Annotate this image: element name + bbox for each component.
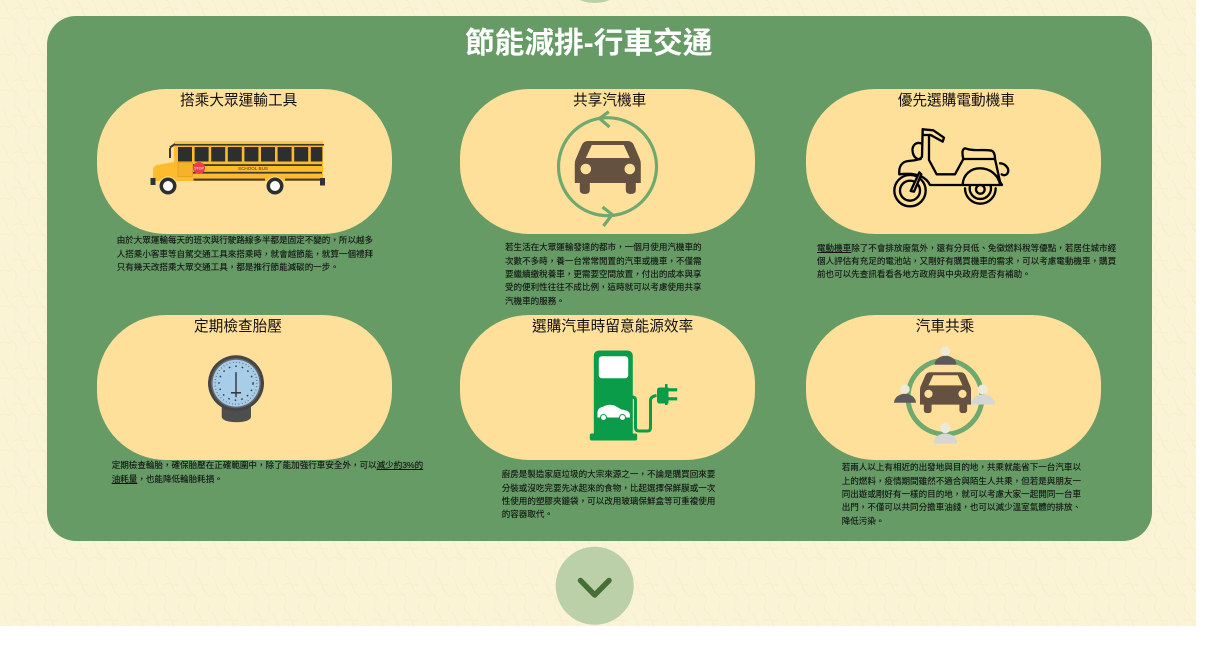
text: energy efficiency: 分裝或沒吃完要先冰起來的食物，比起選擇保鮮膜或一次 xyxy=(502,482,715,492)
heading: tire pressure: 定期檢查胎壓 xyxy=(194,319,282,335)
text: energy efficiency: 的容器取代。 xyxy=(502,509,553,519)
text: energy efficiency xyxy=(502,469,715,519)
text: public transport: 只有幾天改搭乘大眾交通工具，都是推行節能減碳的一步。 xyxy=(117,262,339,272)
title: 節能減排-行車交通 xyxy=(465,26,712,60)
panel: energy saving transport xyxy=(47,16,1152,541)
icon: school bus xyxy=(150,141,325,194)
text: public transport: 人搭乘小客車等自駕交通工具來搭乘時，就會越節能，就算一個禮拜 xyxy=(117,249,373,259)
icon: scooter xyxy=(893,128,1010,208)
scroll button: down chevron xyxy=(556,546,634,625)
card: public transport xyxy=(97,89,392,272)
text: energy efficiency: 性使用的塑膠夾鏈袋，可以改用玻璃保鮮盒等可重複使用 xyxy=(502,496,715,506)
card: energy efficiency xyxy=(460,315,755,519)
heading: energy efficiency: 選購汽車時留意能源效率 xyxy=(532,319,693,335)
icon: school bus: STOP xyxy=(194,167,204,171)
text: shared vehicles: 汽機車的服務。 xyxy=(505,296,565,306)
card: tire pressure xyxy=(97,315,424,484)
text: carpool: 同出遊或剛好有一樣的目的地，就可以考慮大家一起開同一台車 xyxy=(842,489,1081,499)
card: carpool xyxy=(806,315,1101,526)
scroll button: top (partially hidden) xyxy=(580,0,610,3)
text: tire pressure xyxy=(112,460,424,484)
heading: carpool: 汽車共乘 xyxy=(916,319,974,335)
icon: pressure gauge xyxy=(208,355,264,422)
text: shared vehicles: 次數不多時，養一台常常閒置的汽車或機車，不僅需 xyxy=(505,256,702,266)
text: shared vehicles xyxy=(505,242,702,306)
text: carpool: 出門，不僅可以共同分擔車油錢，也可以減少溫室氣體的排放、 xyxy=(842,502,1081,512)
text: public transport: 由於大眾運輸每天的班次與行駛路線多半都是固定不變的，所以越多 xyxy=(117,235,373,245)
text: shared vehicles: 受的便利性往往不成比例，這時就可以考慮使用共享 xyxy=(505,282,702,292)
icon: car with circular arrows xyxy=(556,110,658,227)
text: carpool xyxy=(842,462,1081,526)
text: carpool: 降低污染。 xyxy=(842,516,884,526)
text: electric scooter: 個人評估有充足的電池站，又剛好有購買機車的需求，可以考慮電動機車，購買 xyxy=(817,256,1116,266)
text: shared vehicles: 要繼續繳稅養車，更需要空間放置，付出的成本與享 xyxy=(505,269,702,279)
icon: school bus: SCHOOL BUS xyxy=(238,166,268,171)
text: tire pressure: 定期檢查輪胎，確保胎壓在正確範圍中，除了能加強行車安全外，可以減少約3%的 xyxy=(112,460,423,470)
text: shared vehicles: 若生活在大眾運輸發達的都市，一個月使用汽機車的 xyxy=(505,242,702,252)
text: tire pressure: 油耗量，也能降低輪胎耗損。 xyxy=(112,474,223,484)
text: energy efficiency: 廚房是製造家庭垃圾的大宗來源之一，不論是購買回來要 xyxy=(502,469,715,479)
text: electric scooter: 前也可以先查訊看看各地方政府與中央政府是否有補助。 xyxy=(817,269,1031,279)
card: electric scooter xyxy=(806,89,1116,279)
text: carpool: 上的燃料，疫情期間雖然不適合與陌生人共乘，但若是與朋友一 xyxy=(842,476,1081,486)
icon: EV charging station xyxy=(590,350,678,440)
heading: shared vehicles: 共享汽機車 xyxy=(573,93,646,109)
text: public transport xyxy=(117,235,373,272)
text: carpool: 若兩人以上有相近的出發地與目的地，共乘就能省下一台汽車以 xyxy=(842,462,1081,472)
card: shared vehicles xyxy=(460,89,755,306)
text: electric scooter xyxy=(817,243,1116,279)
heading: public transport: 搭乘大眾運輸工具 xyxy=(180,93,297,109)
heading: electric scooter: 優先選購電動機車 xyxy=(898,93,1015,109)
text: electric scooter: 電動機車除了不會排放廢氣外，還有分貝低、免徵燃料稅等優點，若居住城市經 xyxy=(817,243,1116,253)
icon: car with passengers xyxy=(894,346,995,444)
